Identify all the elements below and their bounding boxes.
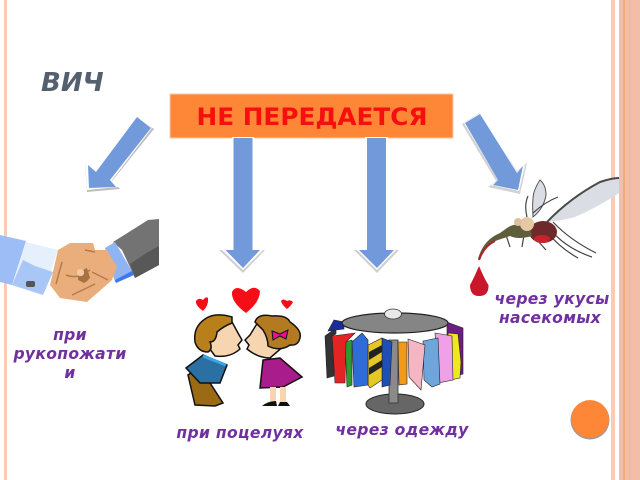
label: insect bites: насекомых [499, 309, 602, 327]
right decorative stripes [611, 0, 640, 480]
banner text: НЕ ПЕРЕДАЕТСЯ [196, 103, 428, 131]
boy [188, 368, 223, 406]
label: kiss: при поцелуях [176, 424, 304, 442]
wings [547, 178, 619, 222]
left decorative stripe [4, 0, 7, 480]
base [366, 394, 424, 414]
title: ВИЧ [41, 68, 104, 98]
thorax and proboscis [478, 224, 532, 260]
orange banner [170, 94, 453, 138]
label: clothes: через одежду [335, 421, 469, 439]
orange circle button [570, 400, 610, 440]
arrow: to handshake [85, 116, 154, 192]
label: handshake: рукопожати [12, 345, 127, 363]
table top [342, 313, 448, 333]
girl [260, 358, 302, 388]
legs [506, 196, 596, 258]
image: mosquito [470, 178, 619, 296]
arrow: to clothes [354, 137, 399, 273]
label: handshake: и [64, 364, 76, 382]
abdomen [529, 221, 557, 243]
arrow: to kiss [219, 137, 265, 273]
image: kissing couple [186, 288, 302, 406]
arrow: to mosquito [462, 113, 527, 194]
label: insect bites: через укусы [494, 290, 610, 308]
image: handshake [0, 219, 159, 302]
icon: hearts [196, 288, 293, 313]
label: handshake [12, 326, 127, 382]
label: handshake: при [53, 326, 87, 344]
blood drop [470, 266, 489, 296]
garments [325, 320, 463, 390]
image: clothes rack [325, 309, 463, 414]
eyes [520, 217, 534, 231]
label: insect bites [494, 290, 610, 327]
